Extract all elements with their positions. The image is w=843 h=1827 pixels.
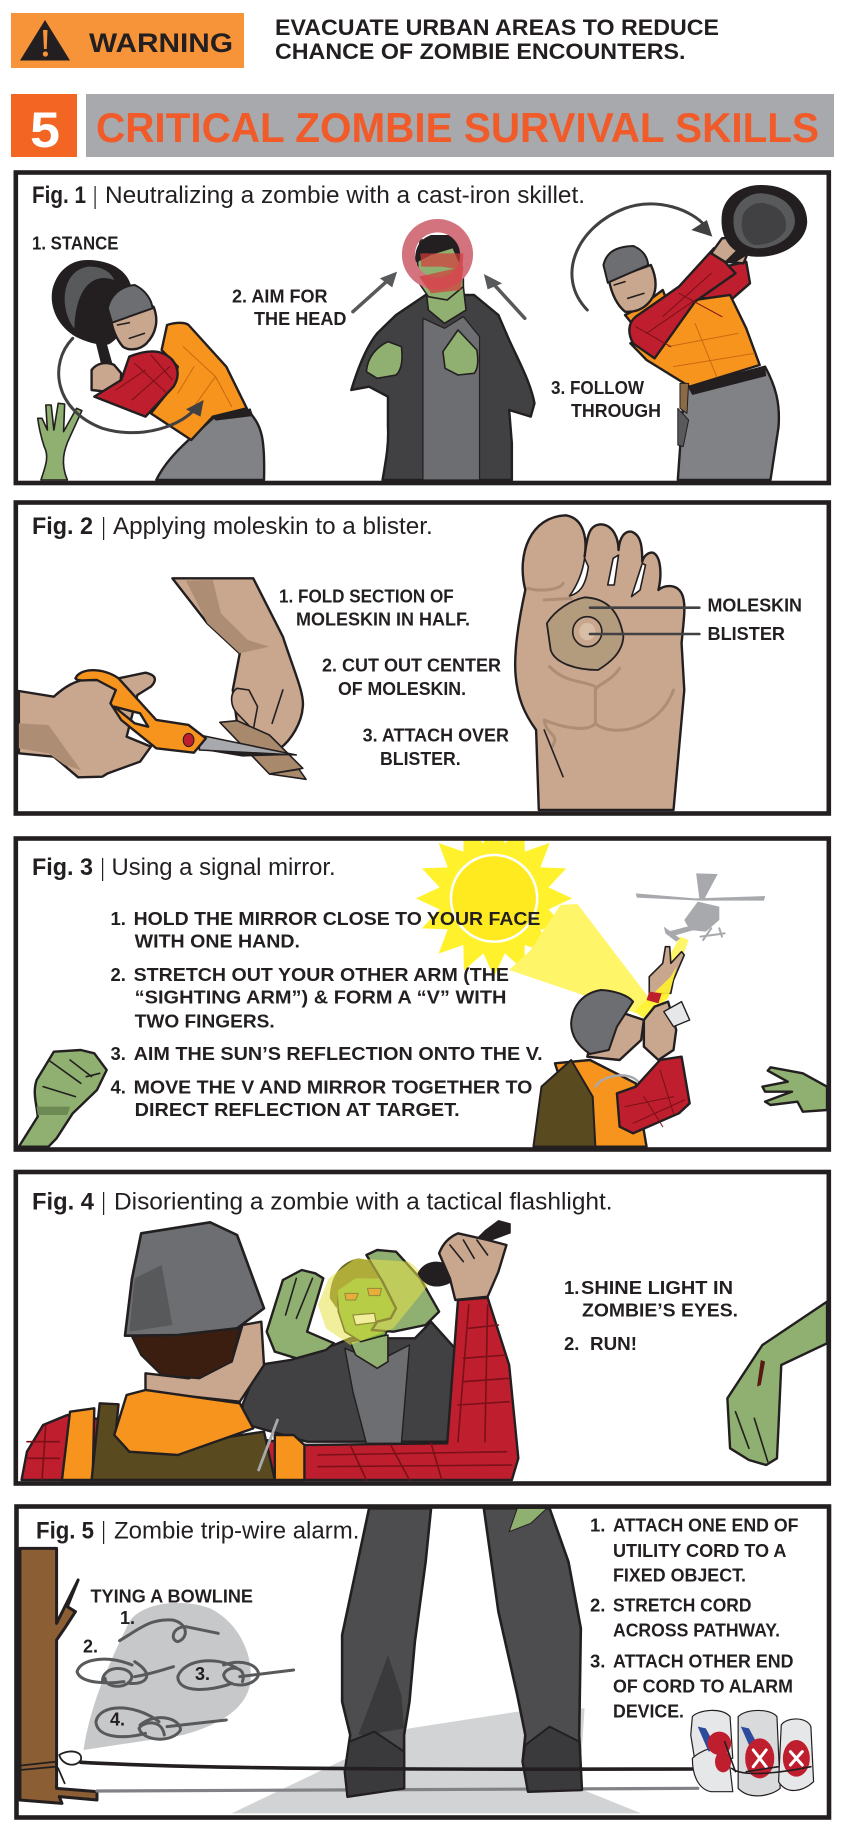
title banner: CRITICAL ZOMBIE SURVIVAL SKILLS: [96, 104, 819, 151]
reflected beam: [509, 904, 689, 1013]
cans: [691, 1710, 814, 1796]
step 3: [363, 726, 509, 769]
middle zombie: [351, 235, 534, 480]
heading: fig 5: Zombie trip-wire alarm.: [114, 1517, 359, 1544]
ground shadow: [232, 1708, 641, 1813]
instruction list: 3.: [590, 1651, 605, 1672]
zombie arm right: [727, 1302, 827, 1465]
instruction list: “SIGHTING ARM”) & FORM A “V” WITH: [135, 987, 506, 1008]
panel: fig 4 flashlight: [16, 1172, 829, 1484]
left man body: [92, 323, 264, 480]
moleskin pieces: [220, 721, 306, 779]
instruction list: HOLD THE MIRROR CLOSE TO YOUR FACE: [134, 908, 540, 929]
instruction list: MOVE THE V AND MIRROR TOGETHER TO: [134, 1076, 532, 1097]
instruction list: ATTACH ONE END OF: [613, 1515, 798, 1536]
bowline labels: 3.: [195, 1664, 210, 1684]
step 3: BLISTER.: [380, 749, 461, 769]
man arm and back: [22, 1298, 518, 1480]
step 1: 1. FOLD SECTION OF: [279, 587, 454, 607]
zombie hands: [267, 1250, 439, 1358]
number badge: 5: [30, 102, 60, 158]
heading: fig 5: Fig. 5: [36, 1517, 94, 1544]
left hand: [19, 673, 155, 777]
zombie fist: [19, 1050, 107, 1147]
legs: [342, 1508, 582, 1797]
label: follow through: THROUGH: [571, 401, 661, 421]
number badge: [11, 94, 77, 158]
swing arc left: [59, 338, 204, 433]
instruction list: 1.: [110, 908, 126, 929]
instruction list: STRETCH OUT YOUR OTHER ARM (THE: [134, 964, 509, 985]
knot 4: [96, 1708, 226, 1739]
warning badge: [11, 13, 244, 68]
left zombie hand: [38, 403, 82, 480]
right man: [625, 237, 779, 480]
steps: 2.: [564, 1333, 579, 1354]
arrows to head: [353, 272, 525, 318]
illustration: tree, legs, cord, cans, knots: [20, 1508, 814, 1813]
flashlight: [418, 1220, 511, 1287]
upper hand holding moleskin: [172, 578, 303, 748]
illustration: hands, scissors, foot: [19, 515, 699, 810]
moleskin and blister on foot: [547, 597, 623, 670]
step 2: [322, 656, 501, 699]
instruction list: DEVICE.: [613, 1700, 684, 1721]
step 2: 2. CUT OUT CENTER: [322, 656, 501, 676]
bowline labels: 1.: [120, 1608, 135, 1628]
skillet left: [52, 260, 132, 370]
cord shadow: [97, 1788, 698, 1791]
warning message: EVACUATE URBAN AREAS TO REDUCE: [275, 15, 719, 40]
steps: SHINE LIGHT IN: [581, 1277, 733, 1298]
man with pack: [533, 990, 690, 1147]
bowline labels: [83, 1586, 253, 1730]
label: stance: 1. STANCE: [32, 233, 118, 253]
panel: fig 1 skillet: [16, 172, 829, 483]
illustration: man, zombie, flashlight: [22, 1220, 827, 1480]
sun: [416, 840, 572, 976]
warning message: CHANCE OF ZOMBIE ENCOUNTERS.: [275, 39, 686, 64]
knot 1: [120, 1620, 218, 1642]
instruction list: ATTACH OTHER END: [613, 1651, 794, 1672]
bowline labels: 4.: [110, 1710, 125, 1730]
instruction list: FIXED OBJECT.: [613, 1565, 746, 1586]
label: follow through: [551, 378, 661, 421]
heading: fig 1: Neutralizing a zombie with a cast-iron skillet.: [105, 182, 585, 209]
flashlight hand: [439, 1233, 506, 1300]
label: aim for the head: THE HEAD: [254, 309, 346, 329]
instruction list: [590, 1515, 798, 1721]
step 3: 3. ATTACH OVER: [363, 726, 509, 746]
label: aim for the head: [232, 287, 346, 329]
panel: fig 2 moleskin: [16, 502, 829, 814]
instruction list: 2.: [590, 1595, 605, 1616]
foot labels: [708, 596, 802, 644]
man vest: [62, 1390, 304, 1480]
warning message: [275, 15, 719, 64]
bowline labels: TYING A BOWLINE: [90, 1586, 253, 1606]
zombie figure: [242, 1258, 458, 1443]
heading: fig 3: Using a signal mirror.: [112, 854, 336, 881]
step 2: OF MOLESKIN.: [338, 679, 466, 699]
target on head: [402, 219, 473, 293]
heading: fig 4: Disorienting a zombie with a tactical flashlight.: [114, 1188, 613, 1215]
illustration: sun, helicopter, man, zombie hands: [19, 820, 827, 1147]
leader lines: [590, 608, 699, 634]
instruction list: [110, 908, 543, 1120]
label: follow through: 3. FOLLOW: [551, 378, 644, 398]
instruction list: 1.: [590, 1515, 605, 1536]
swing arc right: [572, 204, 712, 310]
label: aim for the head: 2. AIM FOR: [232, 287, 328, 307]
steps: RUN!: [590, 1333, 637, 1354]
steps: ZOMBIE’S EYES.: [582, 1300, 738, 1321]
steps: [564, 1277, 738, 1354]
foot labels: BLISTER: [708, 624, 785, 644]
instruction list: ACROSS PATHWAY.: [613, 1620, 780, 1641]
instruction list: WITH ONE HAND.: [135, 931, 300, 952]
skillet right: [722, 185, 807, 263]
foot: [515, 515, 684, 810]
knot 3: [178, 1661, 294, 1689]
tree: [20, 1548, 97, 1803]
instruction list: 2.: [110, 964, 126, 985]
right man head: [603, 246, 656, 312]
man neck and head: [125, 1222, 264, 1402]
bowline shadow: [84, 1603, 251, 1750]
trip cord: [20, 1751, 695, 1783]
zombie hand right: [762, 1067, 827, 1112]
instruction list: UTILITY CORD TO A: [613, 1540, 786, 1561]
instruction list: 3.: [110, 1043, 126, 1064]
warning badge: WARNING: [89, 28, 233, 58]
heading: fig 2: Applying moleskin to a blister.: [113, 513, 433, 540]
heading: fig 3: Fig. 3: [32, 854, 93, 881]
V fingers arm: [635, 947, 684, 1018]
panel: fig 5 tripwire: [16, 1506, 829, 1818]
step 1: MOLESKIN IN HALF.: [296, 609, 470, 629]
instruction list: 4.: [110, 1076, 126, 1097]
instruction list: DIRECT REFLECTION AT TARGET.: [135, 1099, 460, 1120]
step 1: [279, 587, 470, 629]
heading: fig 4: Fig. 4: [32, 1188, 95, 1215]
instruction list: AIM THE SUN’S REFLECTION ONTO THE V.: [134, 1043, 543, 1064]
heading: fig 1: Fig. 1: [32, 182, 86, 209]
instruction list: STRETCH CORD: [613, 1595, 752, 1616]
light cone: [318, 1258, 431, 1345]
instruction list: OF CORD TO ALARM: [613, 1676, 793, 1697]
steps: 1.: [564, 1277, 579, 1298]
scissors blades: [199, 735, 296, 757]
helicopter: [636, 873, 765, 942]
illustration: skillet stance man, zombie, follow-through man: [38, 185, 807, 480]
knot 2: [77, 1659, 173, 1686]
bowline labels: 2.: [83, 1637, 98, 1657]
panel: fig 3 signal mirror: [16, 820, 829, 1150]
heading: fig 2: Fig. 2: [32, 513, 93, 540]
instruction list: TWO FINGERS.: [135, 1011, 275, 1032]
scissors handle: [75, 670, 206, 753]
left stance head: [108, 285, 156, 349]
foot labels: MOLESKIN: [708, 596, 802, 616]
